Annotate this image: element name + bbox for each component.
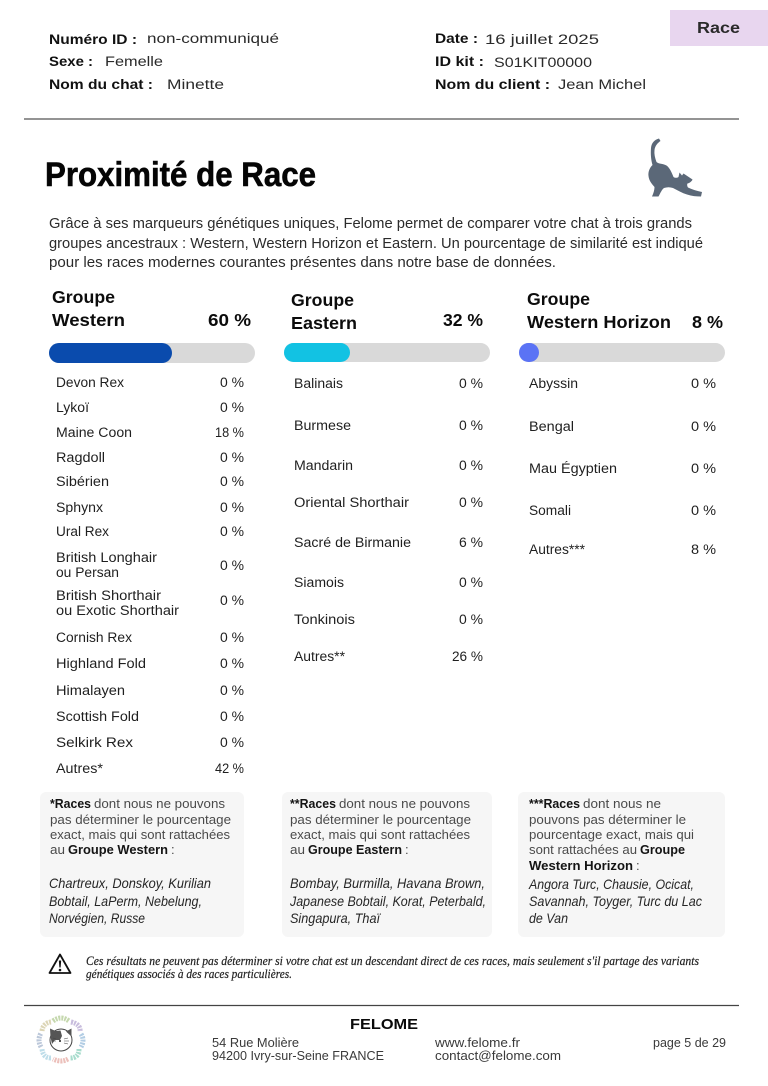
breed list: Eastern: 0 %	[459, 418, 483, 433]
note: Western Horizon: sont rattachées au	[529, 842, 637, 857]
section tab: Race	[670, 10, 768, 46]
breed list: Western: Autres*	[56, 761, 104, 776]
breed list: Western: 0 %	[220, 375, 244, 390]
breed list: Western: 0 %	[220, 735, 244, 750]
breed list: Western: Ural Rex	[56, 524, 109, 539]
note: Eastern: dont nous ne pouvons	[339, 796, 471, 811]
breed list: Western: Devon Rex	[56, 375, 124, 390]
breed list: Western: Himalayen	[56, 683, 125, 698]
progress bar: 32 %	[284, 343, 490, 362]
intro paragraph	[49, 216, 703, 271]
breed list: Western: 18 %	[215, 425, 244, 440]
icon: warning triangle	[50, 954, 70, 973]
heading: Groupe Western Horizon 8 %: 8 %	[692, 312, 723, 332]
note: Eastern	[282, 792, 492, 937]
footer: address	[212, 1035, 384, 1063]
note: Eastern: **Races	[290, 796, 336, 811]
breed list: Western: Maine Coon	[56, 425, 132, 440]
note: Western	[40, 792, 244, 937]
breed list: Western: ou Persan	[56, 565, 119, 580]
header: cat and client information: Date :	[435, 31, 478, 46]
note: Western: dont nous ne pouvons	[94, 796, 226, 811]
footer: contact	[434, 1035, 561, 1063]
breed list: Western: 0 %	[220, 709, 244, 724]
header: cat and client information: Minette	[167, 77, 224, 92]
note: Western: pas déterminer le pourcentage	[50, 812, 231, 827]
note: Western Horizon: Groupe	[640, 842, 685, 857]
breed list: Eastern: Tonkinois	[294, 612, 355, 627]
panel: Groupe Eastern	[284, 290, 490, 664]
note: Western Horizon: dont nous ne	[583, 796, 661, 811]
breed list: Western: Cornish Rex	[56, 630, 132, 645]
breed list: Western Horizon: 8 %	[691, 542, 716, 557]
breed list: Eastern: 0 %	[459, 575, 483, 590]
footer: page number: page 5 de 29	[653, 1035, 726, 1050]
progress bar: 60 %	[49, 343, 255, 363]
note: Western: Bobtail, LaPerm, Nebelung,	[49, 893, 202, 909]
header: cat and client information: Nom du chat :	[49, 77, 153, 92]
breed list: Western: 0 %	[220, 524, 244, 539]
breed list: Western: British Longhair	[56, 550, 158, 565]
heading: Groupe Western Horizon 8 %: Groupe	[527, 289, 590, 309]
note: Western Horizon	[518, 792, 725, 937]
breed list: Western: 0 %	[220, 474, 244, 489]
breed list: Eastern: Siamois	[294, 575, 344, 590]
header: cat and client information	[49, 31, 646, 92]
heading: Groupe Western Horizon 8 %	[527, 289, 723, 332]
heading: Groupe Western 60 %: Western	[52, 310, 125, 330]
breed list: Eastern: 0 %	[459, 495, 483, 510]
note: Western: Norvégien, Russe	[49, 910, 145, 926]
breed list: Eastern: Balinais	[294, 376, 343, 391]
note: Western Horizon: Savannah, Toyger, Turc du Lac	[529, 893, 702, 909]
breed list: Western Horizon: Abyssin	[529, 376, 578, 391]
breed list: Western: Selkirk Rex	[56, 735, 133, 750]
breed list: Western: 0 %	[220, 558, 244, 573]
breed list: Western: 42 %	[215, 761, 244, 776]
breed list: Western: 0 %	[220, 656, 244, 671]
breed list: Western: Sphynx	[56, 500, 103, 515]
note: Eastern: :	[405, 842, 409, 857]
breed list: Eastern: 0 %	[459, 458, 483, 473]
progress bar: 8 %	[519, 343, 725, 362]
header: cat and client information: Femelle	[105, 54, 163, 69]
intro paragraph: groupes ancestraux : Western, Western Horizon et Eastern. Un pourcentage de similarité est indiqué	[49, 236, 703, 252]
breed list: Eastern: 26 %	[452, 649, 483, 664]
note: Eastern: Groupe Eastern	[308, 842, 402, 857]
intro paragraph: Grâce à ses marqueurs génétiques uniques, Felome permet de comparer votre chat à trois grands	[49, 216, 692, 232]
footer: address: 54 Rue Molière	[212, 1035, 299, 1050]
breed list: Eastern: 6 %	[459, 535, 483, 550]
breed list: Western Horizon: Mau Égyptien	[529, 461, 617, 476]
note: Western Horizon: :	[636, 858, 640, 873]
breed list: Western Horizon: 0 %	[691, 419, 716, 434]
disclaimer: génétiques associés à des races particulières.	[86, 967, 292, 981]
note: Eastern: au	[290, 842, 305, 857]
breed list: Western Horizon: 0 %	[691, 461, 716, 476]
breed list: Eastern: 0 %	[459, 376, 483, 391]
note: Western: *Races	[50, 796, 91, 811]
breed list: Eastern: Oriental Shorthair	[294, 495, 410, 510]
breed list: Eastern: Autres**	[294, 649, 346, 664]
header: cat and client information: ID kit :	[435, 54, 484, 69]
footer: company: FELOME	[350, 1016, 418, 1033]
breed list: Western	[56, 375, 244, 776]
breed list: Eastern: Mandarin	[294, 458, 353, 473]
heading: Groupe Western 60 %: Groupe	[52, 287, 115, 307]
note: Western Horizon: Western Horizon	[529, 858, 633, 873]
breed list: Western Horizon: Bengal	[529, 419, 574, 434]
heading: Groupe Western 60 %	[52, 287, 251, 330]
footer: contact: contact@felome.com	[435, 1048, 561, 1063]
disclaimer	[86, 954, 699, 981]
note: Eastern: Singapura, Thaï	[290, 910, 381, 926]
breed list: Western: 0 %	[220, 400, 244, 415]
header: cat and client information: Jean Michel	[558, 77, 646, 92]
header: cat and client information: Numéro ID :	[49, 32, 137, 47]
header: cat and client information: Nom du client :	[435, 77, 550, 92]
note: Western: Groupe Western	[68, 842, 168, 857]
breed list: Western Horizon: 0 %	[691, 376, 716, 391]
note: Western Horizon: pourcentage exact, mais qui	[529, 827, 694, 842]
footer: contact: www.felome.fr	[434, 1035, 521, 1050]
heading: Groupe Eastern 32 %: 32 %	[443, 310, 483, 330]
header: cat and client information: Sexe :	[49, 54, 93, 69]
breed list: Western: Lykoï	[56, 400, 89, 415]
breed list: Western Horizon: Autres***	[529, 542, 586, 557]
breed list: Western: 0 %	[220, 500, 244, 515]
heading: Groupe Western Horizon 8 %: Western Horizon	[527, 312, 671, 332]
note: Western: :	[171, 842, 175, 857]
note: Eastern: Bombay, Burmilla, Havana Brown,	[290, 875, 485, 891]
breed list: Eastern: Burmese	[294, 418, 351, 433]
note: Western Horizon: pouvons pas déterminer le	[529, 812, 686, 827]
logo: cat in DNA wreath	[39, 1018, 83, 1061]
note: Eastern: pas déterminer le pourcentage	[290, 812, 471, 827]
header: cat and client information: non-communiqué	[147, 31, 279, 46]
heading: Groupe Eastern 32 %	[291, 290, 483, 333]
breed list: Western: Sibérien	[56, 474, 109, 489]
breed list: Western: 0 %	[220, 593, 244, 608]
breed list: Western: 0 %	[220, 630, 244, 645]
breed list: Eastern: 0 %	[459, 612, 483, 627]
breed list: Western: ou Exotic Shorthair	[56, 603, 180, 618]
breed list: Western Horizon: Somali	[529, 503, 571, 518]
note: Western: Chartreux, Donskoy, Kurilian	[49, 875, 211, 891]
title: Proximité de Race	[45, 156, 316, 194]
note: Eastern: Japanese Bobtail, Korat, Peterbald,	[289, 893, 486, 909]
note: Eastern: exact, mais qui sont rattachées	[290, 827, 470, 842]
heading: Groupe Western 60 %: 60 %	[208, 310, 251, 330]
heading: Groupe Eastern 32 %: Groupe	[291, 290, 354, 310]
note: Western Horizon: Angora Turc, Chausie, Ocicat,	[528, 876, 694, 892]
breed list: Eastern	[294, 376, 483, 664]
breed list: Western: British Shorthair	[56, 588, 162, 603]
breed list: Western Horizon: 0 %	[691, 503, 716, 518]
breed list: Western: Scottish Fold	[56, 709, 139, 724]
note: Western: exact, mais qui sont rattachées	[50, 827, 230, 842]
breed list: Western Horizon	[529, 376, 716, 557]
breed list: Western: Highland Fold	[56, 656, 146, 671]
breed list: Western: 0 %	[220, 683, 244, 698]
heading: Groupe Eastern 32 %: Eastern	[291, 313, 357, 333]
header: cat and client information: 16 juillet 2025	[485, 32, 599, 47]
note: Western: au	[50, 842, 65, 857]
breed list: Western: 0 %	[220, 450, 244, 465]
breed list: Western: Ragdoll	[56, 450, 105, 465]
panel: Groupe Western	[49, 287, 255, 776]
panel: Groupe Western Horizon	[519, 289, 725, 557]
icon: stretching cat	[648, 138, 702, 196]
intro paragraph: pour les races modernes courantes présentes dans notre base de données.	[49, 255, 556, 271]
note: Western Horizon: ***Races	[529, 796, 580, 811]
disclaimer: Ces résultats ne peuvent pas déterminer si votre chat est un descendant direct de ces races, mais seulement s'il partage des variants	[86, 954, 699, 968]
breed list: Eastern: Sacré de Birmanie	[294, 535, 411, 550]
note: Western Horizon: de Van	[529, 910, 568, 926]
footer: address: 94200 Ivry-sur-Seine FRANCE	[212, 1048, 384, 1063]
header: cat and client information: S01KIT00000	[494, 55, 592, 70]
section tab: Race: Race	[697, 20, 740, 37]
